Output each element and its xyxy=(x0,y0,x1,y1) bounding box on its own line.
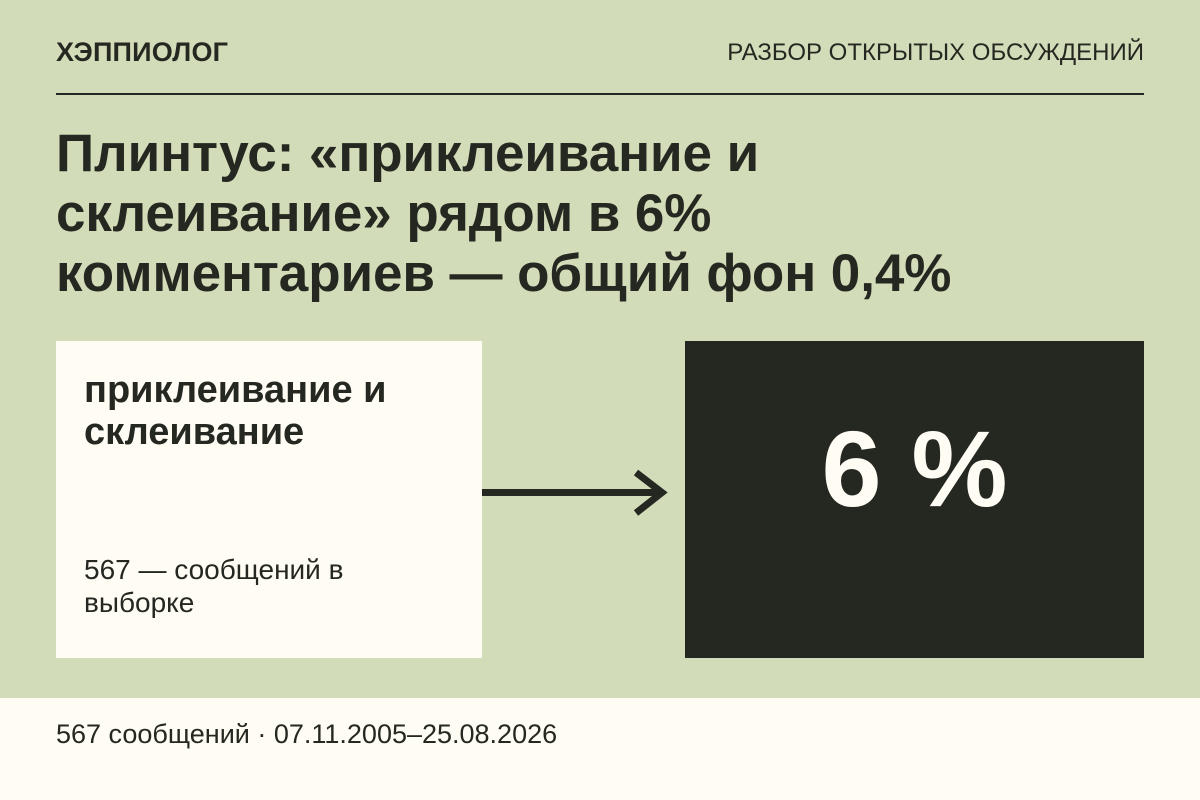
panel: phrase card xyxy=(56,341,482,658)
header caption: РАЗБОР ОТКРЫТЫХ ОБСУЖДЕНИЙ xyxy=(727,39,1144,66)
title: комментариев — общий фон 0,4% xyxy=(56,244,951,303)
card sample size note: выборке xyxy=(84,587,194,618)
card heading: приклеивание и xyxy=(84,369,386,411)
brand name: ХЭППИОЛОГ xyxy=(56,37,228,67)
title: склеивание» рядом в 6% xyxy=(56,184,711,243)
card sample size note xyxy=(84,554,343,618)
percent value: 6 % xyxy=(821,408,1008,529)
footer text: 567 сообщений · 07.11.2005–25.08.2026 xyxy=(56,719,557,749)
arrow xyxy=(482,470,668,516)
footer band xyxy=(0,698,1200,800)
panel: result value xyxy=(685,341,1144,658)
title xyxy=(56,124,951,303)
card sample size note: 567 — сообщений в xyxy=(84,554,343,585)
card heading: склеивание xyxy=(84,411,304,453)
card heading xyxy=(84,369,386,453)
header rule xyxy=(56,93,1144,95)
title: Плинтус: «приклеивание и xyxy=(56,124,759,183)
